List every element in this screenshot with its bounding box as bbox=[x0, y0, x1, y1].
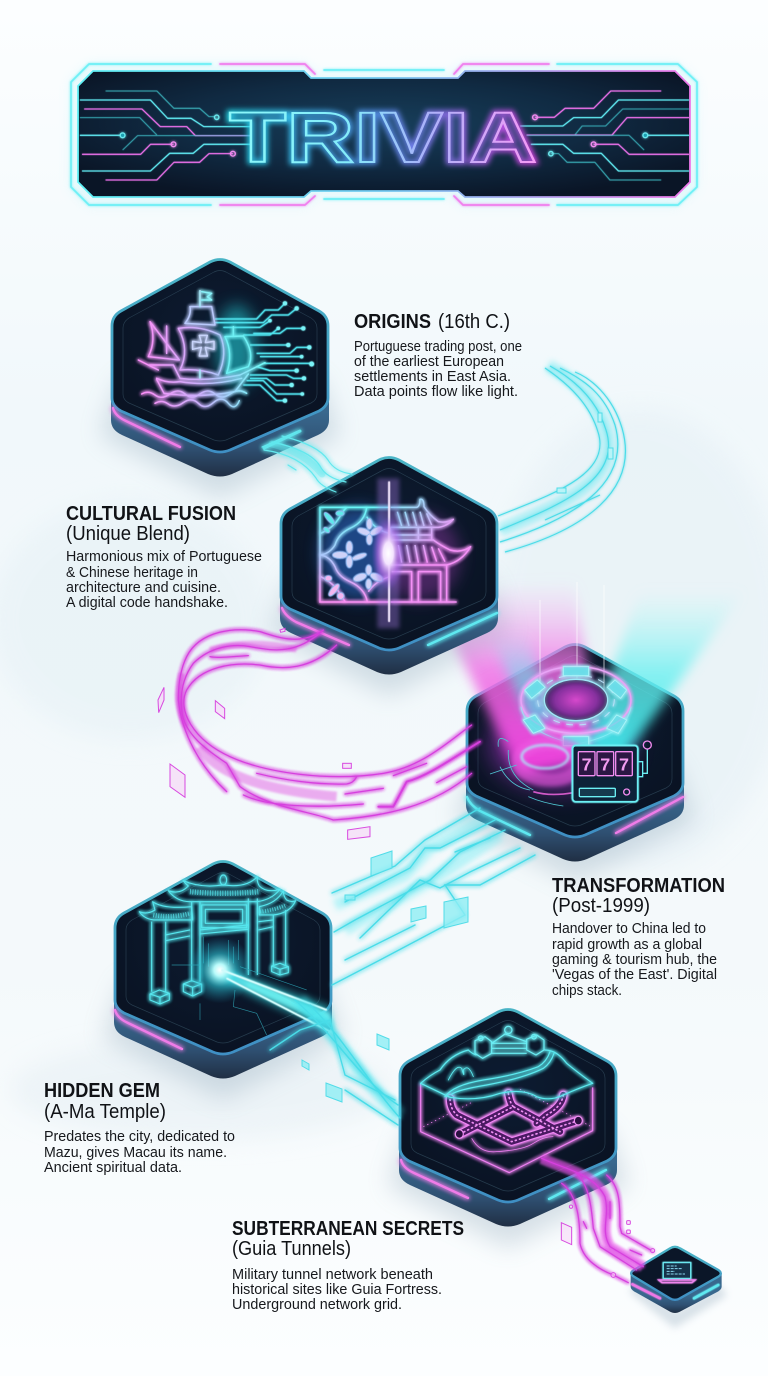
icon: tile and pagoda split bbox=[320, 478, 471, 628]
swirl base bbox=[490, 738, 582, 806]
icon: poker chip and slot machine bbox=[490, 667, 651, 806]
text: transformation: gaming & tourism hub, the bbox=[552, 952, 717, 968]
text: hidden gem: Predates the city, dedicated to bbox=[44, 1129, 235, 1145]
small end tile: laptop bbox=[631, 1247, 723, 1320]
tile 5: subterranean secrets bbox=[388, 1010, 628, 1248]
text: origins: (16th C.) bbox=[438, 310, 510, 333]
tile edge strips bbox=[632, 1284, 660, 1298]
text: transformation: chips stack. bbox=[552, 983, 622, 999]
slot machine: 7 bbox=[582, 755, 592, 775]
circuit traces bbox=[80, 91, 689, 180]
title banner bbox=[71, 64, 697, 205]
TRIVIA word glow: TRIVIA bbox=[229, 99, 537, 178]
icon: terrain with tunnels bbox=[421, 1026, 593, 1173]
tile edge strips bbox=[282, 608, 497, 645]
text: transformation: Handover to China led to bbox=[552, 921, 706, 937]
TRIVIA word: TRIVIA bbox=[229, 99, 537, 178]
halves glow bbox=[320, 507, 397, 600]
banner outer frame segments bbox=[71, 64, 697, 205]
connector: cyan circuits tile 3 to tile 4 bbox=[332, 808, 535, 985]
text: subterranean secrets: Underground network grid. bbox=[232, 1297, 402, 1313]
light core and beam bbox=[187, 923, 340, 1037]
text: cultural fusion bbox=[66, 502, 262, 611]
text: hidden gem: Mazu, gives Macau its name. bbox=[44, 1145, 227, 1161]
tile edge strips bbox=[401, 1160, 606, 1199]
text: cultural fusion: A digital code handshake. bbox=[66, 595, 228, 611]
slot machine: 7 bbox=[600, 755, 610, 775]
tile edge strips bbox=[467, 797, 683, 835]
text: subterranean secrets: SUBTERRANEAN SECRETS bbox=[232, 1217, 464, 1240]
ribbon strands bbox=[498, 366, 625, 552]
poker chip bbox=[521, 667, 631, 746]
center light seam bbox=[372, 478, 405, 628]
terrain bbox=[421, 1050, 593, 1099]
connector: cyan ribbon from tile 2 bbox=[498, 366, 625, 552]
text: cultural fusion: CULTURAL FUSION bbox=[66, 502, 236, 525]
text: origins: Data points flow like light. bbox=[354, 384, 518, 400]
text: cultural fusion: Harmonious mix of Portuguese bbox=[66, 549, 262, 565]
hexagon tile bbox=[100, 260, 340, 498]
strands bbox=[178, 630, 480, 820]
text: transformation: (Post-1999) bbox=[552, 894, 650, 917]
tile 4: hidden gem bbox=[103, 862, 343, 1100]
text: origins: Portuguese trading post, one bbox=[354, 339, 522, 355]
icon: laptop bbox=[659, 1263, 695, 1283]
banner panel bbox=[78, 71, 690, 197]
data flecks bbox=[158, 628, 370, 839]
glow band bbox=[300, 1000, 400, 1115]
translucent bands bbox=[178, 644, 337, 797]
inner data streaks bbox=[172, 937, 307, 1035]
text: subterranean secrets bbox=[232, 1217, 464, 1313]
text: origins: ORIGINS bbox=[354, 310, 431, 333]
hexagon tile bbox=[388, 1010, 628, 1248]
azulejo flowers bbox=[323, 511, 384, 599]
tile 2: cultural fusion bbox=[269, 458, 509, 696]
text: subterranean secrets: (Guia Tunnels) bbox=[232, 1237, 351, 1260]
tile edge strips bbox=[115, 1010, 182, 1049]
text: origins: of the earliest European bbox=[354, 354, 504, 370]
nodes and documents bbox=[561, 1205, 655, 1277]
circuit nodes bbox=[268, 301, 314, 403]
hexagon tile bbox=[103, 862, 343, 1100]
strands bbox=[270, 1000, 400, 1125]
text: cultural fusion: & Chinese heritage in bbox=[66, 565, 198, 581]
glow band bbox=[542, 1158, 643, 1267]
connector: magenta lines tile 5 to laptop tile bbox=[542, 1158, 655, 1283]
fortress bbox=[475, 1026, 544, 1058]
azulejo tile bbox=[320, 507, 389, 602]
text: hidden gem: (A-Ma Temple) bbox=[44, 1100, 166, 1123]
text: hidden gem bbox=[44, 1079, 235, 1176]
text: subterranean secrets: Military tunnel network beneath bbox=[232, 1267, 433, 1283]
data blocks bbox=[302, 1034, 389, 1102]
connector: magenta ribbon from tile 2 to tile 3 bbox=[158, 628, 480, 839]
ribbon glow band bbox=[500, 366, 609, 530]
circuit nodes bbox=[120, 115, 648, 156]
text: transformation: rapid growth as a global bbox=[552, 937, 702, 953]
glow band bbox=[335, 815, 500, 930]
cross-section box bbox=[421, 1083, 593, 1173]
icon: caravel ship with data lines bbox=[138, 291, 314, 407]
slot machine: 7 bbox=[619, 755, 629, 775]
connector: tile 1 to tile 2 bbox=[262, 431, 352, 492]
gate bbox=[139, 875, 296, 1004]
connector: cyan lines tile 4 to tile 5 bbox=[270, 1000, 400, 1125]
tile 1: origins bbox=[100, 260, 340, 498]
strands bbox=[542, 1158, 653, 1283]
data flecks bbox=[557, 413, 613, 493]
text: hidden gem: HIDDEN GEM bbox=[44, 1079, 160, 1102]
strands bbox=[332, 808, 535, 985]
tunnels bbox=[450, 1093, 582, 1142]
text: subterranean secrets: historical sites like Guia Fortress. bbox=[232, 1282, 442, 1298]
light beams bbox=[452, 580, 745, 790]
tile edge strip bbox=[113, 408, 180, 447]
banner glow bbox=[71, 64, 696, 205]
data blocks bbox=[345, 851, 468, 928]
text: transformation bbox=[552, 874, 725, 999]
text: cultural fusion: architecture and cuisine. bbox=[66, 580, 221, 596]
circuit data lines bbox=[215, 303, 312, 401]
tile body bbox=[631, 1247, 723, 1320]
ship glow bbox=[217, 305, 257, 388]
text: hidden gem: Ancient spiritual data. bbox=[44, 1160, 182, 1176]
text: origins bbox=[354, 310, 522, 400]
icon: temple gate with light path bbox=[139, 875, 340, 1037]
text: transformation: TRANSFORMATION bbox=[552, 874, 725, 897]
text: transformation: 'Vegas of the East'. Digital bbox=[552, 967, 717, 983]
text: cultural fusion: (Unique Blend) bbox=[66, 522, 190, 545]
hexagon tile bbox=[269, 458, 509, 696]
text: origins: settlements in East Asia. bbox=[354, 369, 511, 385]
slot machine bbox=[573, 741, 651, 802]
pagoda bbox=[391, 499, 471, 602]
tile 3: transformation bbox=[452, 580, 745, 883]
hexagon tile bbox=[455, 644, 695, 883]
ship bbox=[138, 291, 265, 407]
